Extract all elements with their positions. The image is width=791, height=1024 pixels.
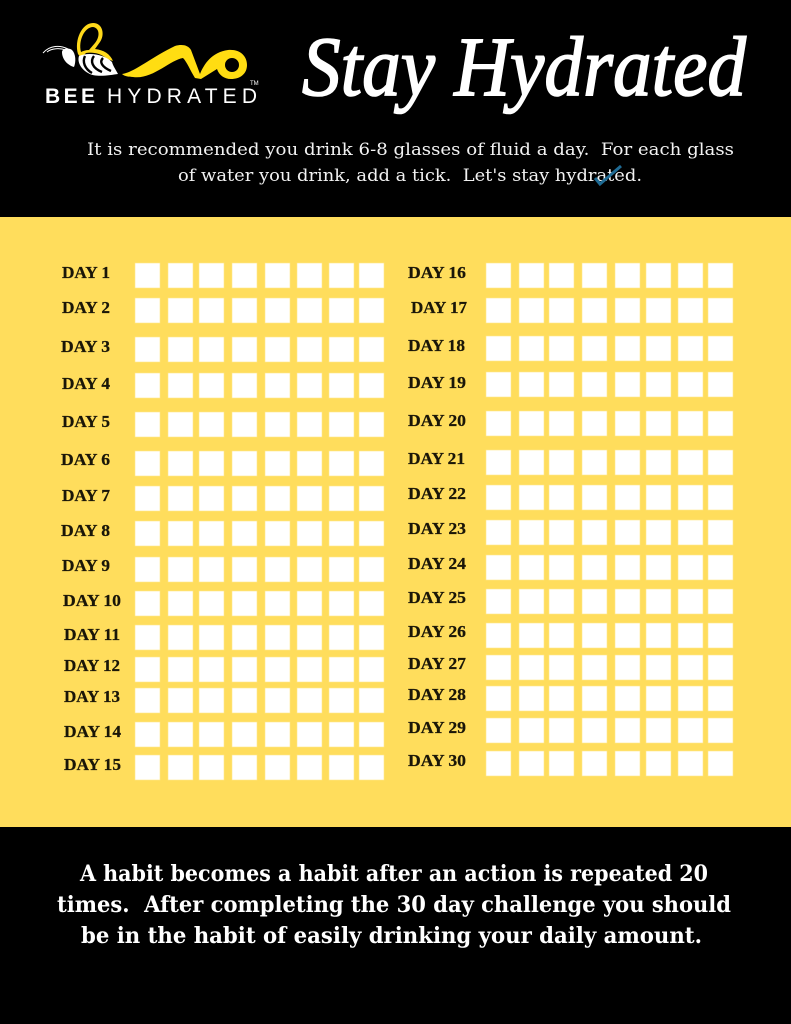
tick boxes: days 1 to 15: [135, 263, 384, 780]
labels: days 1 to 15: DAY 8: [61, 521, 110, 540]
labels: days 16 to 30: DAY 26: [408, 622, 466, 641]
labels: days 1 to 15: DAY 1: [62, 263, 110, 282]
labels: days 1 to 15: DAY 7: [62, 486, 110, 505]
logo: Bee Hydrated: [43, 23, 259, 108]
header background: [0, 0, 791, 217]
labels: days 1 to 15: DAY 11: [64, 625, 120, 644]
labels: days 1 to 15: DAY 6: [61, 450, 110, 469]
tick boxes: days 16 to 30: [486, 263, 733, 776]
labels: days 16 to 30: DAY 29: [408, 718, 466, 737]
labels: days 16 to 30: [408, 263, 467, 770]
days 1 to 15: [61, 263, 384, 780]
footer message: be in the habit of easily drinking your daily amount.: [81, 923, 702, 949]
labels: days 1 to 15: DAY 3: [61, 337, 110, 356]
labels: days 16 to 30: DAY 24: [408, 554, 466, 573]
labels: days 16 to 30: DAY 21: [408, 449, 465, 468]
labels: days 1 to 15: DAY 12: [64, 656, 120, 675]
yellow tracker panel: [0, 217, 791, 827]
labels: days 1 to 15: [61, 263, 121, 774]
labels: days 16 to 30: DAY 25: [408, 588, 466, 607]
labels: days 16 to 30: DAY 19: [408, 373, 466, 392]
intro text: It is recommended you drink 6-8 glasses of fluid a day. For each glass: [87, 140, 734, 160]
labels: days 16 to 30: DAY 27: [408, 654, 466, 673]
intro text: [87, 140, 734, 186]
wordmark: HYDRATED: [107, 85, 257, 108]
labels: days 16 to 30: DAY 23: [408, 519, 466, 538]
labels: days 16 to 30: DAY 16: [408, 263, 466, 282]
labels: days 1 to 15: DAY 5: [62, 412, 110, 431]
footer message: times. After completing the 30 day challenge you should: [57, 892, 731, 918]
labels: days 1 to 15: DAY 4: [62, 374, 110, 393]
icon: bee: [43, 23, 118, 76]
footer message: [57, 861, 731, 949]
footer message: A habit becomes a habit after an action is repeated 20: [79, 861, 708, 887]
labels: days 1 to 15: DAY 10: [63, 591, 121, 610]
labels: days 16 to 30: DAY 20: [408, 411, 466, 430]
labels: days 1 to 15: DAY 9: [62, 556, 110, 575]
labels: days 16 to 30: DAY 18: [408, 336, 465, 355]
icon: yellow ribbon: [122, 45, 247, 79]
labels: days 1 to 15: DAY 15: [64, 755, 121, 774]
wordmark: BEE: [45, 85, 95, 108]
labels: days 16 to 30: DAY 30: [408, 751, 466, 770]
days 16 to 30: [408, 263, 733, 776]
labels: days 16 to 30: DAY 28: [408, 685, 466, 704]
labels: days 1 to 15: DAY 2: [62, 298, 110, 317]
wordmark: TM: [250, 81, 259, 87]
intro text: of water you drink, add a tick. Let's stay hydrated.: [178, 166, 642, 186]
labels: days 1 to 15: DAY 13: [64, 687, 120, 706]
wordmark: [45, 81, 259, 108]
title: Stay Hydrated: [302, 20, 746, 114]
labels: days 16 to 30: DAY 17: [411, 298, 467, 317]
icon: blue tick: [595, 166, 621, 184]
labels: days 16 to 30: DAY 22: [408, 484, 466, 503]
labels: days 1 to 15: DAY 14: [64, 722, 121, 741]
